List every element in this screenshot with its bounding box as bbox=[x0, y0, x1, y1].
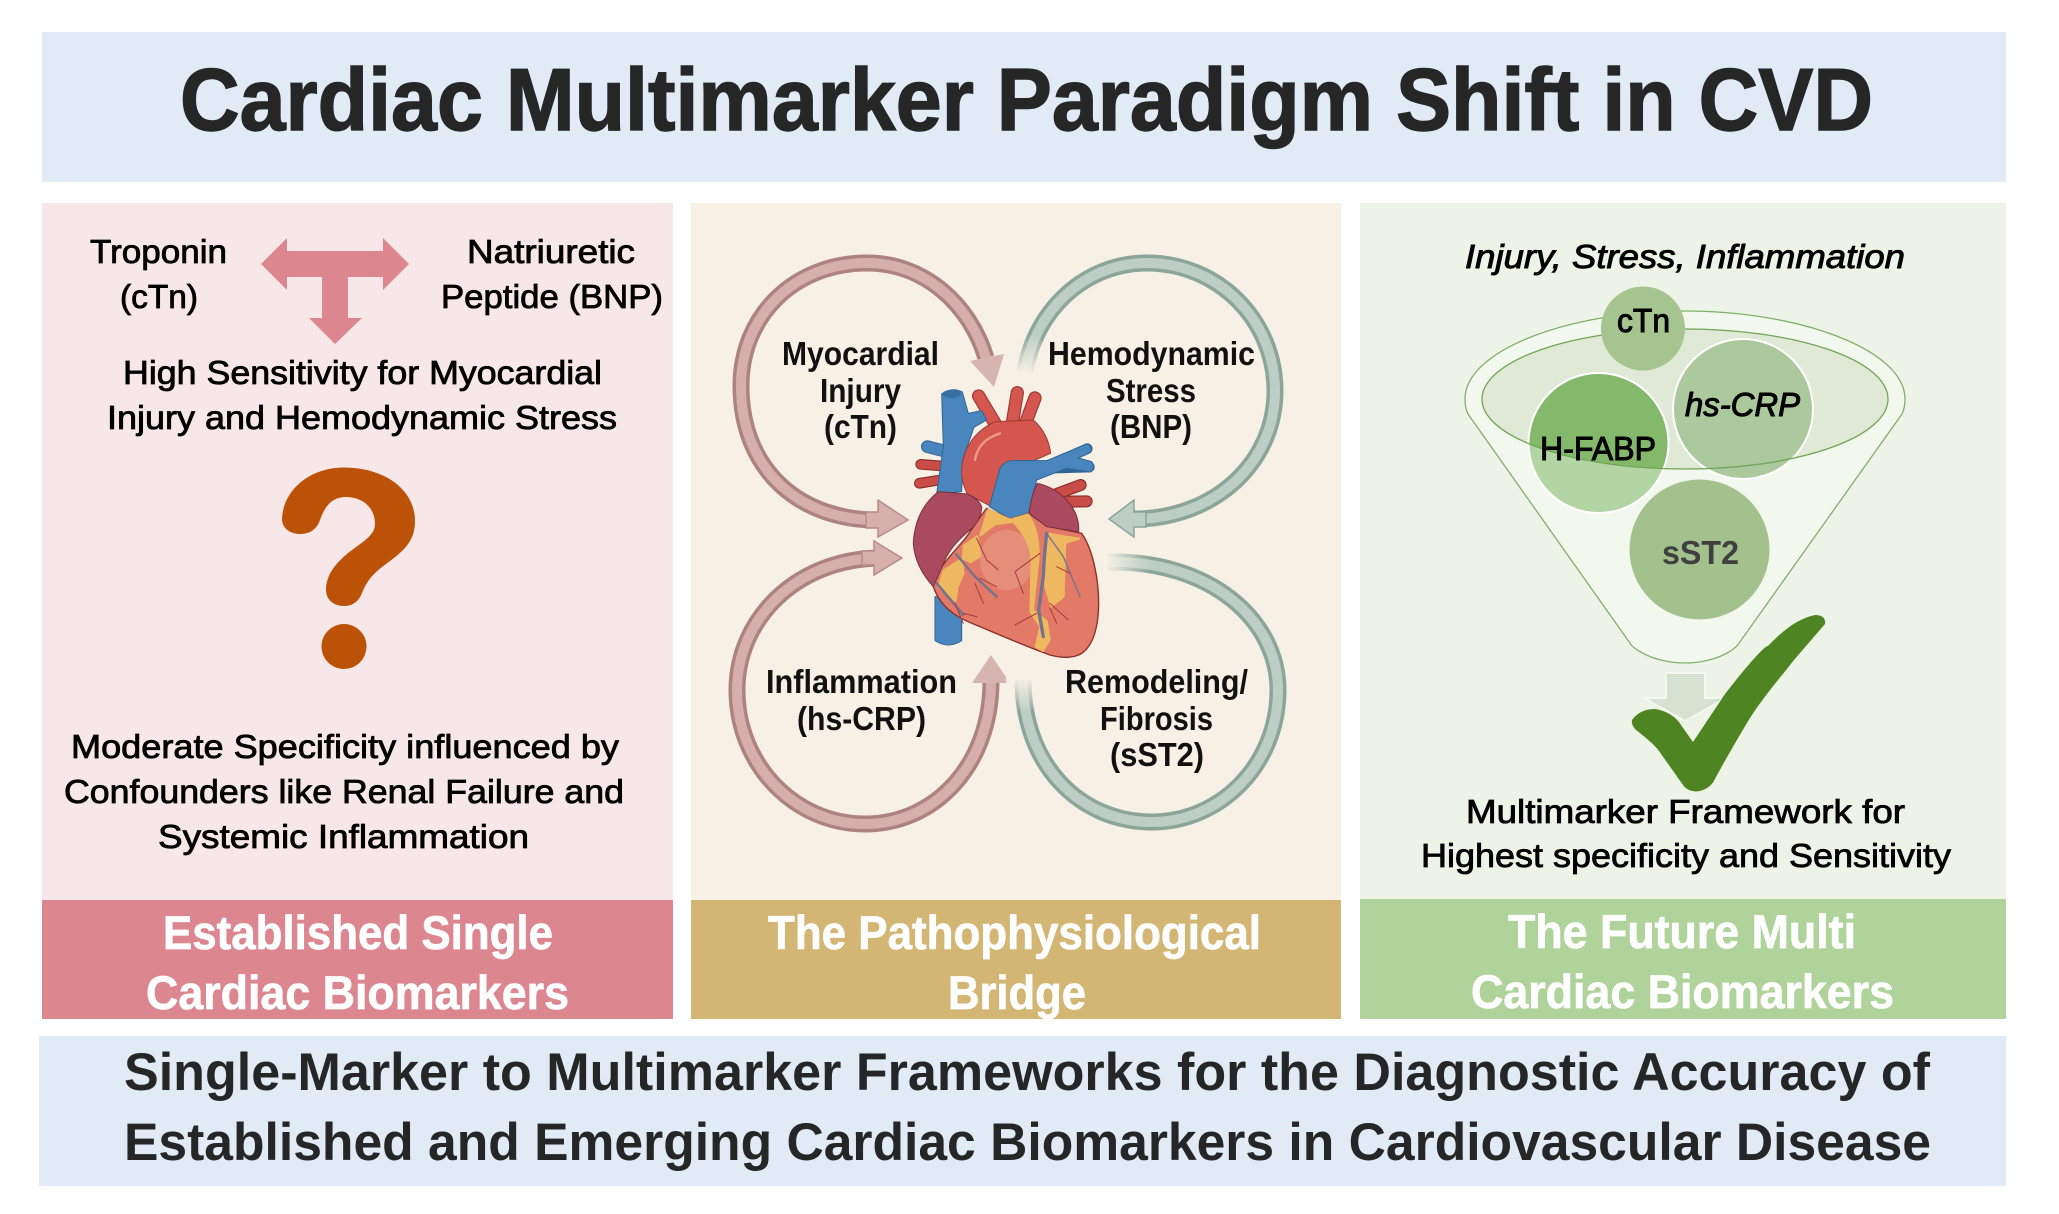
arrow: myocardial injury loop bbox=[741, 263, 1004, 537]
label: hs-CRP: hs-CRP bbox=[1685, 386, 1800, 423]
label: remodeling fibrosis bbox=[1065, 663, 1248, 773]
footer banner: Single-Marker to Multimarker Frameworks for the Diagnostic Accuracy of bbox=[124, 1043, 1930, 1102]
marker: cTn bbox=[1601, 286, 1685, 370]
heading band: established single: Cardiac Biomarkers bbox=[146, 966, 569, 1019]
label: natriuretic peptide: Natriuretic bbox=[467, 233, 635, 270]
heading band: established single: Established Single bbox=[163, 906, 553, 959]
marker: cTn: cTn bbox=[1617, 302, 1670, 339]
title banner: Cardiac Multimarker Paradigm Shift in CVD bbox=[180, 50, 1873, 149]
label: myocardial injury bbox=[782, 335, 939, 445]
label: H-FABP: H-FABP bbox=[1540, 430, 1656, 467]
heading band: future multi: The Future Multi bbox=[1508, 905, 1856, 958]
label: hemodynamic stress: (BNP) bbox=[1110, 408, 1192, 445]
text: multimarker framework: Highest specificity and Sensitivity bbox=[1421, 837, 1952, 874]
text: moderate specificity: Systemic Inflammation bbox=[158, 818, 529, 855]
label: myocardial injury: Myocardial bbox=[782, 335, 939, 372]
text: high sensitivity: Injury and Hemodynamic Stress bbox=[107, 399, 617, 436]
icon: funnel bbox=[1465, 311, 1905, 663]
label: remodeling fibrosis: Remodeling/ bbox=[1065, 663, 1248, 700]
text: injury stress inflammation: Injury, Stress, Inflammation bbox=[1465, 238, 1905, 275]
label: myocardial injury: Injury bbox=[820, 372, 902, 409]
label: remodeling fibrosis: Fibrosis bbox=[1100, 700, 1213, 737]
text: moderate specificity: Moderate Specificity influenced by bbox=[71, 728, 620, 765]
panel: established single cardiac biomarkers bbox=[42, 203, 673, 900]
arrow: hemodynamic stress loop bbox=[1008, 263, 1275, 537]
label: inflammation: Inflammation bbox=[766, 663, 957, 700]
text: moderate specificity bbox=[64, 728, 624, 855]
label: troponin: (cTn) bbox=[120, 278, 198, 315]
label: remodeling fibrosis: (sST2) bbox=[1110, 736, 1204, 773]
label: myocardial injury: (cTn) bbox=[824, 408, 897, 445]
title banner bbox=[42, 32, 2006, 182]
icon: anatomical heart bbox=[913, 390, 1099, 657]
marker: hs-CRP bbox=[1673, 339, 1813, 479]
label: inflammation: (hs-CRP) bbox=[797, 700, 926, 737]
footer banner: Established and Emerging Cardiac Biomarkers in Cardiovascular Disease bbox=[124, 1113, 1931, 1172]
heading band: future multi: Cardiac Biomarkers bbox=[1471, 965, 1894, 1018]
arrow: remodeling loop bbox=[1006, 545, 1278, 822]
label: hemodynamic stress: Hemodynamic bbox=[1048, 335, 1255, 372]
label: troponin: Troponin bbox=[90, 233, 227, 270]
label: inflammation bbox=[766, 663, 957, 737]
icon: check mark bbox=[1632, 615, 1825, 792]
icon: three-way T arrow bbox=[261, 238, 409, 344]
heading band: future multi bbox=[1360, 899, 2006, 1019]
heading band: pathophysiological bridge bbox=[691, 900, 1341, 1019]
text: multimarker framework bbox=[1421, 793, 1952, 874]
panel: pathophysiological bridge bbox=[691, 203, 1341, 900]
text: multimarker framework: Multimarker Framework for bbox=[1466, 793, 1905, 830]
label: hemodynamic stress: Stress bbox=[1106, 372, 1196, 409]
heading band: pathophysiological bridge: The Pathophysiological bbox=[768, 906, 1261, 959]
marker: sST2 bbox=[1630, 480, 1770, 620]
text: high sensitivity: High Sensitivity for Myocardial bbox=[123, 354, 602, 391]
heading band: pathophysiological bridge: Bridge bbox=[948, 966, 1086, 1019]
panel: future multi cardiac biomarkers bbox=[1360, 203, 2006, 900]
arrow: funnel output bbox=[1644, 673, 1726, 721]
funnel rim line bbox=[1482, 329, 1888, 469]
heading band: established single bbox=[42, 900, 673, 1019]
footer banner bbox=[39, 1036, 2006, 1186]
arrow: inflammation loop bbox=[737, 541, 1010, 824]
icon: question mark bbox=[282, 468, 415, 669]
label: sST2: sST2 bbox=[1662, 534, 1739, 571]
text: high sensitivity bbox=[107, 354, 617, 436]
label: troponin bbox=[90, 233, 227, 315]
text: moderate specificity: Confounders like Renal Failure and bbox=[64, 773, 624, 810]
label: natriuretic peptide: Peptide (BNP) bbox=[441, 278, 663, 315]
label: hemodynamic stress bbox=[1048, 335, 1255, 445]
marker: H-FABP bbox=[1528, 373, 1668, 513]
label: natriuretic peptide bbox=[441, 233, 663, 315]
